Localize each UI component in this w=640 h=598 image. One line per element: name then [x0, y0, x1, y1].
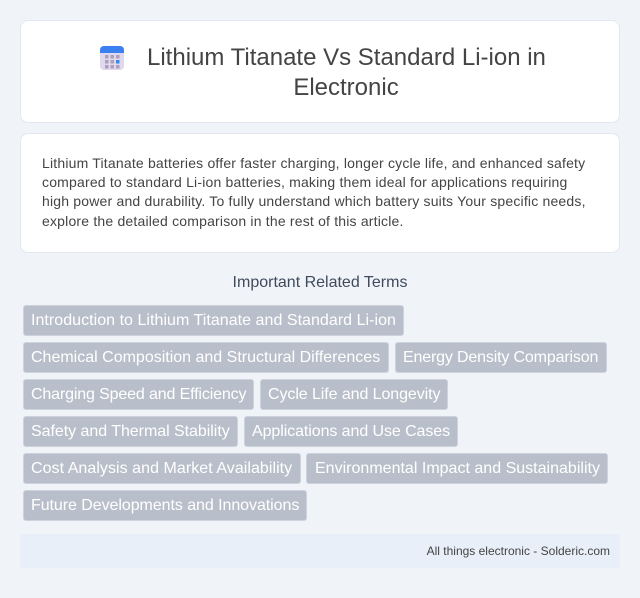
- tag: [244, 416, 458, 447]
- tag: [23, 342, 389, 373]
- tag: Chemical Composition and Structural Differences: [31, 349, 380, 366]
- tag: Environmental Impact and Sustainability: [315, 460, 600, 477]
- related terms heading: Important Related Terms: [233, 274, 407, 291]
- tag: Cost Analysis and Market Availability: [31, 460, 292, 477]
- header card: [20, 20, 620, 123]
- icon: calendar: [100, 46, 124, 70]
- tag: [23, 453, 301, 484]
- intro text panel: [20, 133, 620, 253]
- title: [147, 44, 546, 101]
- tag: [23, 305, 404, 336]
- footer bar: [20, 534, 620, 568]
- intro text panel: explore the detailed comparison in the rest of this article.: [42, 213, 404, 229]
- tag: Introduction to Lithium Titanate and Standard Li-ion: [31, 312, 396, 329]
- tag: Charging Speed and Efficiency: [31, 386, 246, 403]
- intro text panel: high power and durability. To fully understand which battery suits Your specific needs,: [42, 193, 586, 209]
- tag: [23, 490, 307, 521]
- tag: [260, 379, 448, 410]
- tag: Safety and Thermal Stability: [31, 423, 230, 440]
- tag: [23, 416, 238, 447]
- tags list: [23, 305, 608, 521]
- title: Electronic: [293, 74, 399, 101]
- intro text panel: compared to standard Li-ion batteries, making them ideal for applications requiring: [42, 174, 568, 190]
- tag: Future Developments and Innovations: [31, 497, 299, 514]
- tag: Cycle Life and Longevity: [268, 386, 440, 403]
- footer bar: All things electronic - Solderic.com: [427, 544, 610, 558]
- tag: Applications and Use Cases: [252, 423, 450, 440]
- tag: Energy Density Comparison: [403, 349, 598, 366]
- tag: [395, 342, 607, 373]
- intro text panel: Lithium Titanate batteries offer faster charging, longer cycle life, and enhanced safety: [42, 155, 585, 171]
- tag: [306, 453, 608, 484]
- tag: [23, 379, 254, 410]
- title: Lithium Titanate Vs Standard Li-ion in: [147, 44, 546, 71]
